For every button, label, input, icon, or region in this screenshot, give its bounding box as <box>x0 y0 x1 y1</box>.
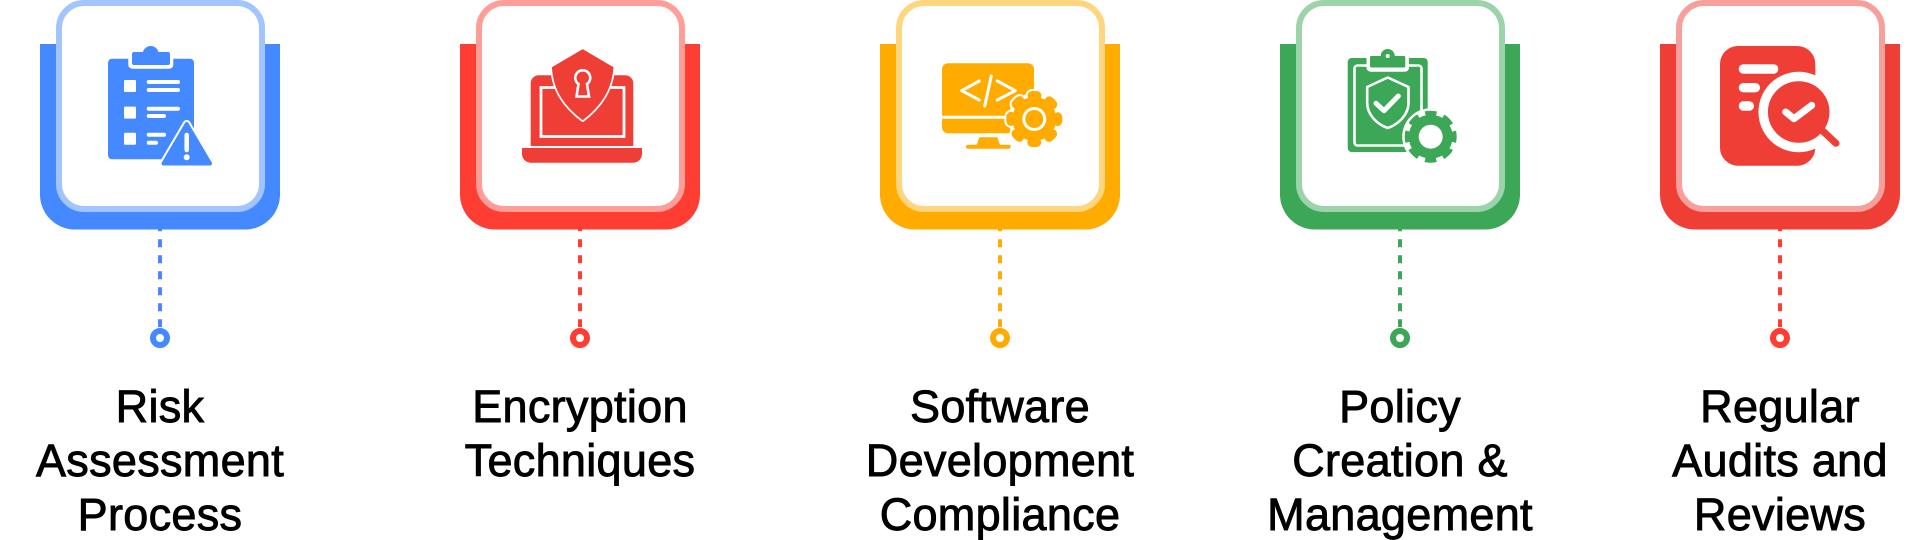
label: Assessment <box>36 435 284 486</box>
label <box>36 381 284 540</box>
panel: policy management <box>1267 3 1533 540</box>
coloured backing <box>1660 44 1900 230</box>
dashed connector <box>998 229 1002 327</box>
panel: risk assessment <box>36 3 284 540</box>
coloured backing <box>40 44 280 230</box>
node <box>1393 331 1407 345</box>
white card <box>899 3 1102 209</box>
icon: laptop with shield <box>522 50 642 163</box>
coloured backing <box>880 44 1120 230</box>
white card <box>479 3 682 209</box>
icon: document with magnifier <box>1720 46 1836 166</box>
panel: audits and reviews <box>1660 3 1900 540</box>
dashed connector <box>158 229 162 327</box>
coloured backing <box>460 44 700 230</box>
label <box>1672 381 1888 540</box>
label <box>1267 381 1533 540</box>
node <box>153 331 167 345</box>
label: Development <box>866 435 1134 486</box>
dashed connector <box>578 229 582 327</box>
label: Compliance <box>880 489 1120 540</box>
dashed connector <box>1778 229 1782 327</box>
label: Process <box>78 489 242 540</box>
dashed connector <box>1398 229 1402 327</box>
white card <box>1679 3 1882 209</box>
label: Management <box>1267 489 1533 540</box>
label: Policy <box>1339 381 1461 432</box>
node <box>573 331 587 345</box>
label: Audits and <box>1672 435 1888 486</box>
label: Techniques <box>465 435 695 486</box>
node <box>1773 331 1787 345</box>
label <box>465 381 695 486</box>
node <box>993 331 1007 345</box>
label: Regular <box>1700 381 1860 432</box>
icon: clipboard with warning <box>108 46 210 164</box>
white card <box>59 3 262 209</box>
label: Creation & <box>1292 435 1508 486</box>
panel: encryption <box>460 3 700 486</box>
icon: clipboard with shield and gear <box>1348 49 1459 165</box>
label: Software <box>910 381 1090 432</box>
label: Risk <box>116 381 205 432</box>
coloured backing <box>1280 44 1520 230</box>
label: Reviews <box>1694 489 1866 540</box>
panel: software compliance <box>866 3 1134 540</box>
label <box>866 381 1134 540</box>
white card <box>1299 3 1502 209</box>
label: Encryption <box>472 381 688 432</box>
icon: monitor with code and gear <box>942 63 1058 149</box>
